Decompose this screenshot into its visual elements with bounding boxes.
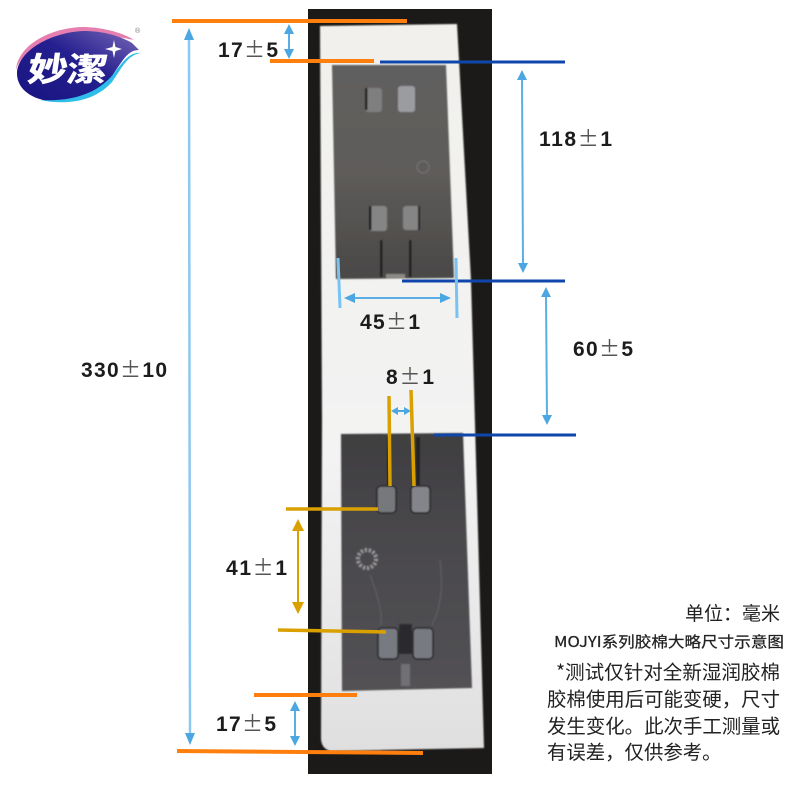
text: measurement disclaimer: 胶棉使用后可能变硬，尺寸 [547,683,780,712]
label: slot spacing: 8±1 [386,361,434,391]
arrow: bottom margin [290,701,300,746]
photo: white sponge strip [320,24,484,751]
dimension lines: orange edges [172,21,423,753]
arrow: upper plate length [517,70,528,273]
text: measurement disclaimer: *测试仅针对全新湿润胶棉 [556,656,780,685]
arrow: plate width [344,293,451,303]
plate width guides [338,258,457,318]
arrow: slot spacing [391,407,411,415]
photo: lower metal plate [341,433,472,691]
dimension lines: dark blue edges [380,62,576,435]
photo: sponge on dark background [308,9,492,774]
text: measurement disclaimer: 有误差，仅供参考。 [547,736,722,765]
text: measurement disclaimer [547,656,780,765]
arrow: total length [184,28,195,745]
label: plate width: 45±1 [360,306,420,336]
logo wordmark: 妙潔 [25,43,111,91]
arrow: plate gap [541,287,552,425]
label: bottom margin: 17±5 [216,708,276,738]
label: top margin: 17±5 [218,34,278,64]
logo sparkle [105,40,122,58]
text: measurement disclaimer: 发生变化。此次手工测量或 [547,710,780,739]
text: unit: 单位：毫米 [685,599,780,626]
logo registered mark: ® [135,27,141,35]
logo: 妙潔 brand mark [16,27,141,102]
gold guides: clip spacing [278,390,414,632]
label: clip distance: 41±1 [226,552,287,582]
text: diagram title: MOJYI系列胶棉大略尺寸示意图 [554,631,784,652]
label: plate gap: 60±5 [573,333,633,363]
arrow: top margin [284,24,294,59]
label: total length: 330±10 [81,354,167,384]
arrow: clip distance [292,519,304,614]
label: upper plate length: 118±1 [539,123,612,153]
photo: upper metal plate [332,65,454,279]
